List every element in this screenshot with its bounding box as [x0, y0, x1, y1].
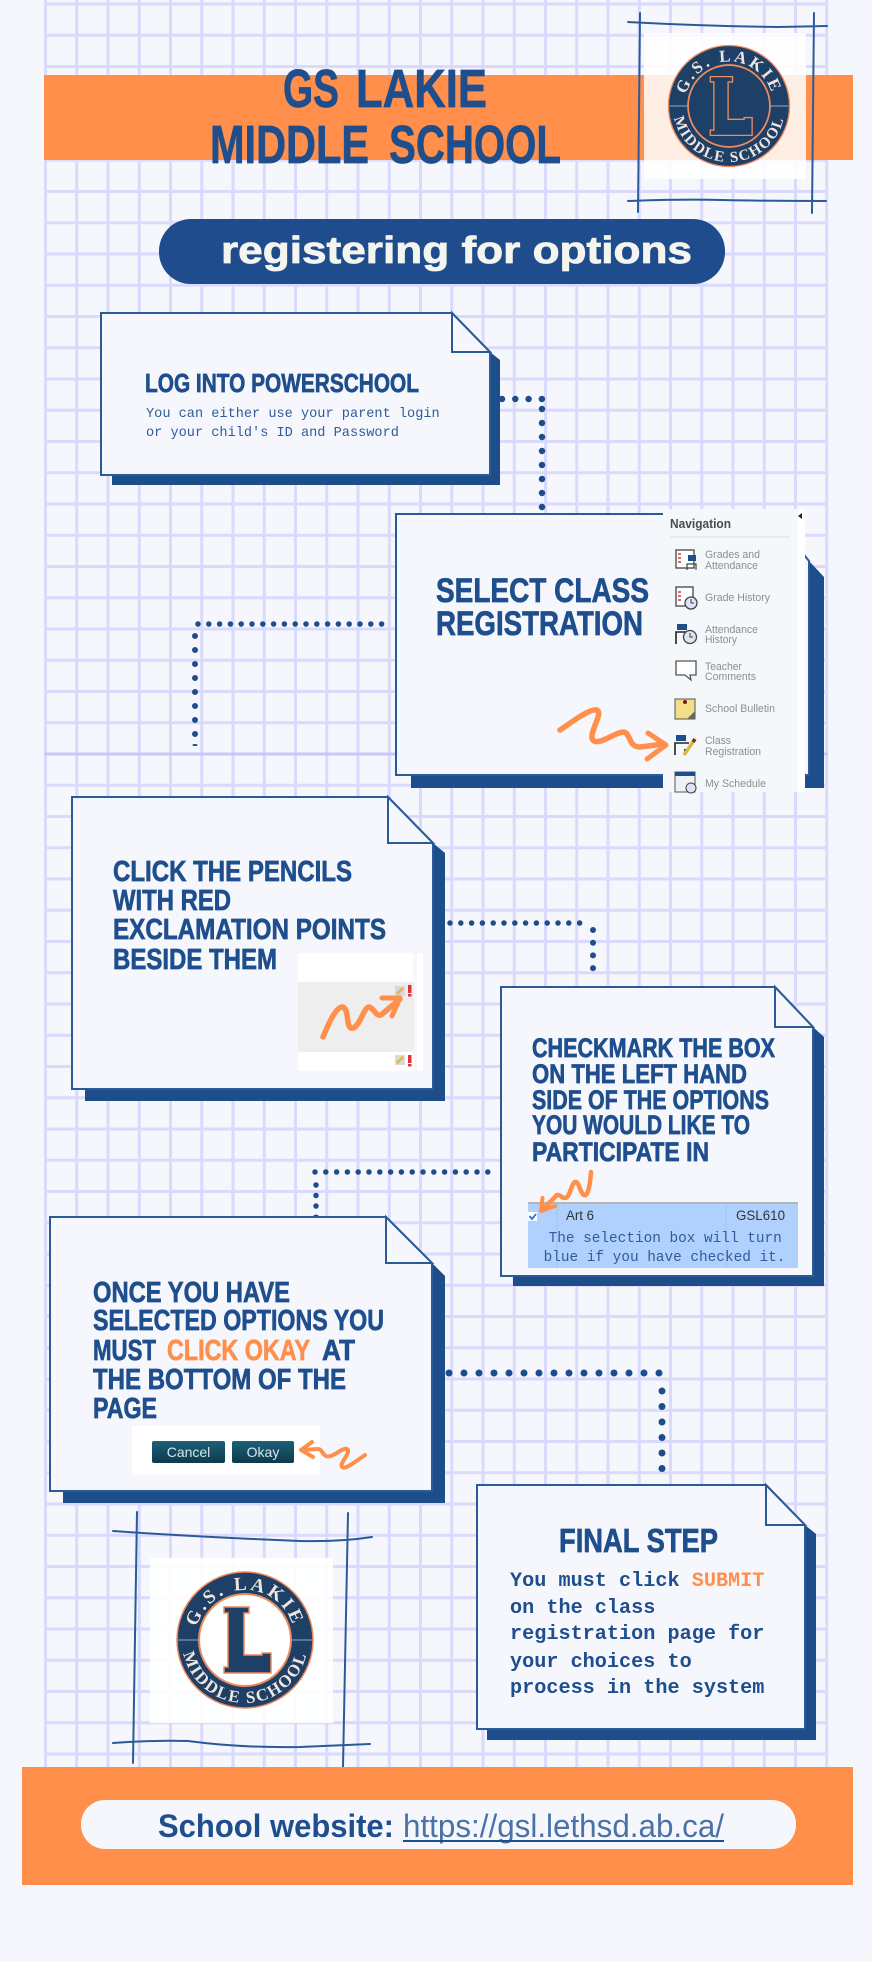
subtitle pill: registering for options: [221, 230, 692, 272]
icon: teacher comments: [676, 661, 696, 680]
arrow: to pencil icon: [323, 998, 400, 1037]
heading: click the pencils: WITH RED: [113, 885, 231, 917]
connector: step 1 to step 2: [502, 399, 545, 519]
heading: once you have selected: ONCE YOU HAVE: [93, 1277, 290, 1309]
heading: once you have selected: SELECTED OPTIONS YOU: [93, 1305, 384, 1337]
heading: checkmark the box: SIDE OF THE OPTIONS: [532, 1085, 769, 1115]
heading: select class registration: SELECT CLASS: [436, 572, 649, 610]
sketched frame: bottom logo: [113, 1512, 372, 1767]
panel: step 2 select class registration: [396, 509, 824, 793]
heading: click the pencils: BESIDE THEM: [113, 944, 277, 976]
navigation menu screenshot: Class: [705, 735, 731, 747]
connector: step 2 to step 3: [192, 624, 383, 746]
buttons screenshot: [132, 1426, 320, 1475]
heading: once you have selected: THE BOTTOM OF THE: [93, 1364, 346, 1396]
panel: final step: [477, 1485, 816, 1740]
selected option screenshot: [528, 1202, 798, 1268]
text: submit instructions: registration page for: [510, 1623, 764, 1646]
text: selection note: blue if you have checked it.: [544, 1250, 785, 1266]
connector: step 5 to final step: [449, 1373, 662, 1470]
button: okay: Okay: [247, 1444, 279, 1460]
text: submit instructions: your choices to: [510, 1651, 692, 1674]
title: GS: [283, 59, 339, 119]
heading: checkmark the box: ON THE LEFT HAND: [532, 1059, 747, 1089]
heading: once you have selected: MUST: [93, 1335, 156, 1367]
navigation menu screenshot: Teacher: [705, 661, 742, 673]
icon: grades: [676, 550, 696, 570]
button: okay: [232, 1441, 294, 1463]
text: login note: You can either use your parent login: [146, 407, 440, 422]
icon: class registration: [675, 735, 695, 755]
heading: final step: FINAL STEP: [559, 1522, 718, 1559]
heading: checkmark the box: CHECKMARK THE BOX: [532, 1033, 775, 1063]
icon: grade history: [676, 587, 697, 609]
pencils screenshot: [298, 953, 423, 1071]
heading: once you have selected: AT: [322, 1335, 355, 1367]
text: submit instructions: [510, 1570, 764, 1700]
navigation menu screenshot: Attendance: [705, 624, 758, 636]
navigation menu screenshot: Registration: [705, 746, 761, 758]
icon: school bulletin: [675, 699, 695, 719]
logo: header: G.S. LAKIE: [677, 50, 781, 92]
icon: my schedule: [675, 772, 696, 793]
header band: [44, 75, 853, 160]
navigation menu screenshot: My Schedule: [705, 778, 766, 790]
logo: bottom: G.S. LAKIE: [187, 1578, 304, 1624]
button: cancel: Cancel: [167, 1444, 210, 1460]
selected option screenshot: GSL610: [736, 1208, 785, 1223]
heading: once you have selected: CLICK OKAY: [167, 1335, 310, 1367]
arrow: to okay button: [301, 1442, 365, 1468]
sketched frame: header logo: [628, 13, 827, 213]
panel: step 4 checkmark the box: [501, 987, 824, 1286]
icon: attendance history: [676, 624, 696, 644]
logo: header: [644, 33, 806, 179]
connector: step 3 to step 4: [450, 923, 593, 969]
text: selection note: [544, 1231, 785, 1266]
logo: bottom: MIDDLE SCHOOL: [183, 1650, 306, 1703]
navigation menu screenshot: Comments: [705, 671, 756, 683]
arrow: to checkbox: [541, 1172, 591, 1211]
subtitle pill: [159, 219, 725, 284]
panel: step 3 click the pencils: [72, 797, 445, 1101]
text: website url: https://gsl.lethsd.ab.ca/: [403, 1808, 724, 1844]
navigation menu screenshot: School Bulletin: [705, 703, 775, 715]
title: [210, 59, 561, 175]
website pill: [81, 1800, 796, 1849]
connector: step 4 to step 5: [313, 1172, 489, 1217]
heading: checkmark the box: [532, 1033, 775, 1167]
button: cancel: [152, 1441, 225, 1463]
text: login note: or your child's ID and Password: [146, 426, 399, 441]
navigation menu screenshot: Grade History: [705, 592, 770, 604]
text: submit instructions: You must click SUBMIT: [510, 1570, 764, 1593]
heading: checkmark the box: YOU WOULD LIKE TO: [532, 1110, 750, 1140]
text: selection note: The selection box will turn: [549, 1231, 782, 1247]
heading: click the pencils: CLICK THE PENCILS: [113, 856, 352, 888]
navigation menu screenshot: History: [705, 634, 737, 646]
title: LAKIE: [356, 59, 487, 119]
selected option screenshot: Art 6: [566, 1208, 594, 1223]
text: submit instructions: process in the system: [510, 1677, 764, 1700]
text: login note: [146, 407, 440, 441]
text: school website: School website:: [158, 1808, 394, 1844]
panel: step 5 once you have selected: [50, 1217, 445, 1503]
heading: once you have selected: [93, 1277, 384, 1425]
heading: log into powerschool: LOG INTO POWERSCHOOL: [145, 368, 419, 398]
footer band: [22, 1767, 853, 1885]
heading: once you have selected: PAGE: [93, 1393, 157, 1425]
navigation menu screenshot: Attendance: [705, 560, 758, 572]
heading: checkmark the box: PARTICIPATE IN: [532, 1137, 709, 1167]
logo: header: MIDDLE SCHOOL: [674, 115, 784, 162]
title: SCHOOL: [389, 115, 561, 175]
title: MIDDLE: [210, 115, 369, 175]
heading: click the pencils: [113, 856, 386, 976]
heading: click the pencils: EXCLAMATION POINTS: [113, 914, 386, 946]
heading: select class registration: [436, 572, 649, 643]
arrow: to class registration: [560, 710, 666, 759]
panel: step 1 log in: [101, 313, 500, 485]
navigation menu screenshot: Navigation: [670, 516, 731, 531]
heading: select class registration: REGISTRATION: [436, 605, 643, 643]
navigation menu screenshot: [663, 509, 805, 793]
logo: bottom: [150, 1558, 333, 1723]
navigation menu screenshot: Grades and: [705, 549, 760, 561]
text: submit instructions: on the class: [510, 1597, 655, 1620]
